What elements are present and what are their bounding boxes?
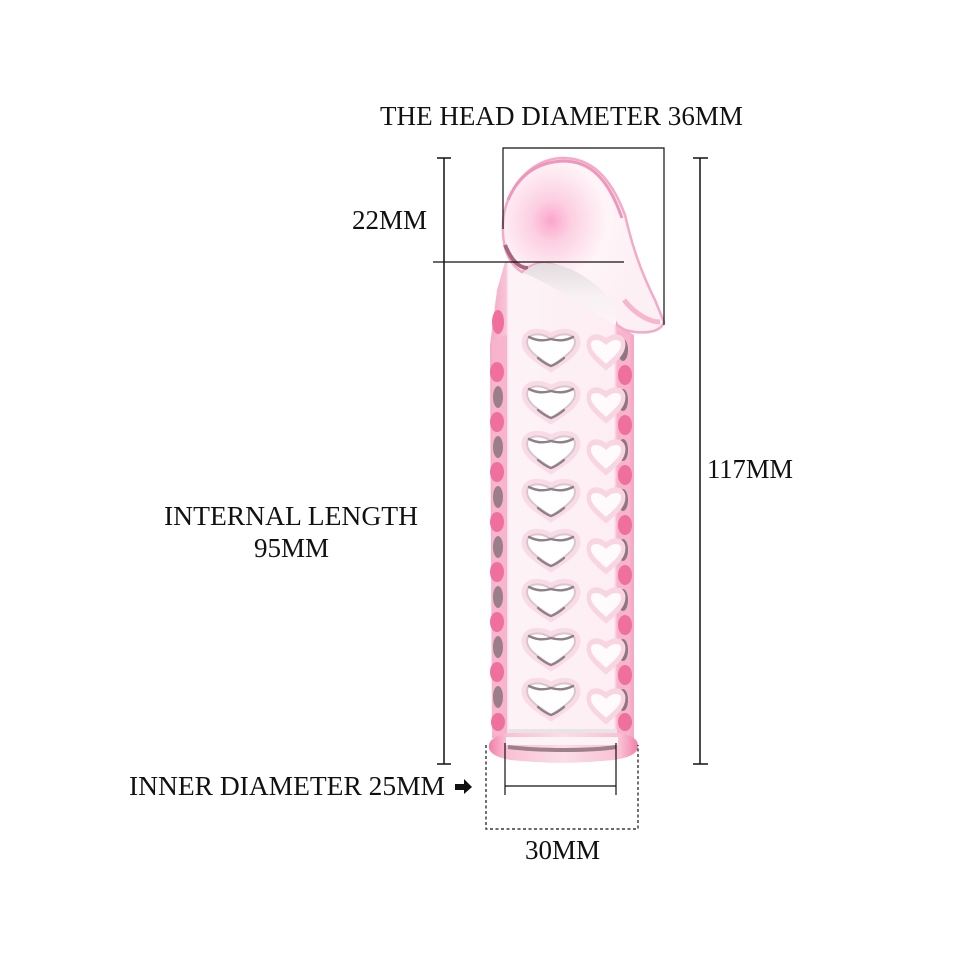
label: 30mm: 30MM bbox=[525, 835, 600, 865]
left side ribs bbox=[490, 310, 507, 735]
label: head diameter: THE HEAD DIAMETER 36MM bbox=[380, 101, 743, 131]
dimension: total length right bracket bbox=[693, 158, 708, 764]
product illustration bbox=[489, 158, 664, 763]
dimension: overall length left bracket bbox=[437, 158, 451, 764]
label: 117mm: 117MM bbox=[707, 454, 793, 484]
dimension: inner diameter bbox=[505, 743, 616, 795]
product body bbox=[490, 262, 634, 738]
label: inner diameter: INNER DIAMETER 25MM bbox=[129, 771, 445, 801]
dimension: head height line bbox=[433, 261, 624, 263]
translucent cap overlay bbox=[523, 263, 616, 325]
base flange bbox=[489, 729, 638, 763]
right side ribs bbox=[617, 330, 632, 735]
label: internal length bbox=[164, 501, 418, 563]
heart pattern centre column bbox=[527, 334, 575, 715]
head bbox=[503, 158, 664, 332]
heart pattern right column bbox=[589, 337, 623, 721]
label: 22mm: 22MM bbox=[352, 205, 427, 235]
label: internal length: INTERNAL LENGTH bbox=[164, 501, 418, 531]
label: internal length: 95MM bbox=[254, 533, 329, 563]
dimension: head diameter bbox=[503, 148, 664, 325]
dimension: outer diameter dashed bbox=[486, 745, 638, 829]
icon: arrow pointing right bbox=[455, 779, 472, 794]
